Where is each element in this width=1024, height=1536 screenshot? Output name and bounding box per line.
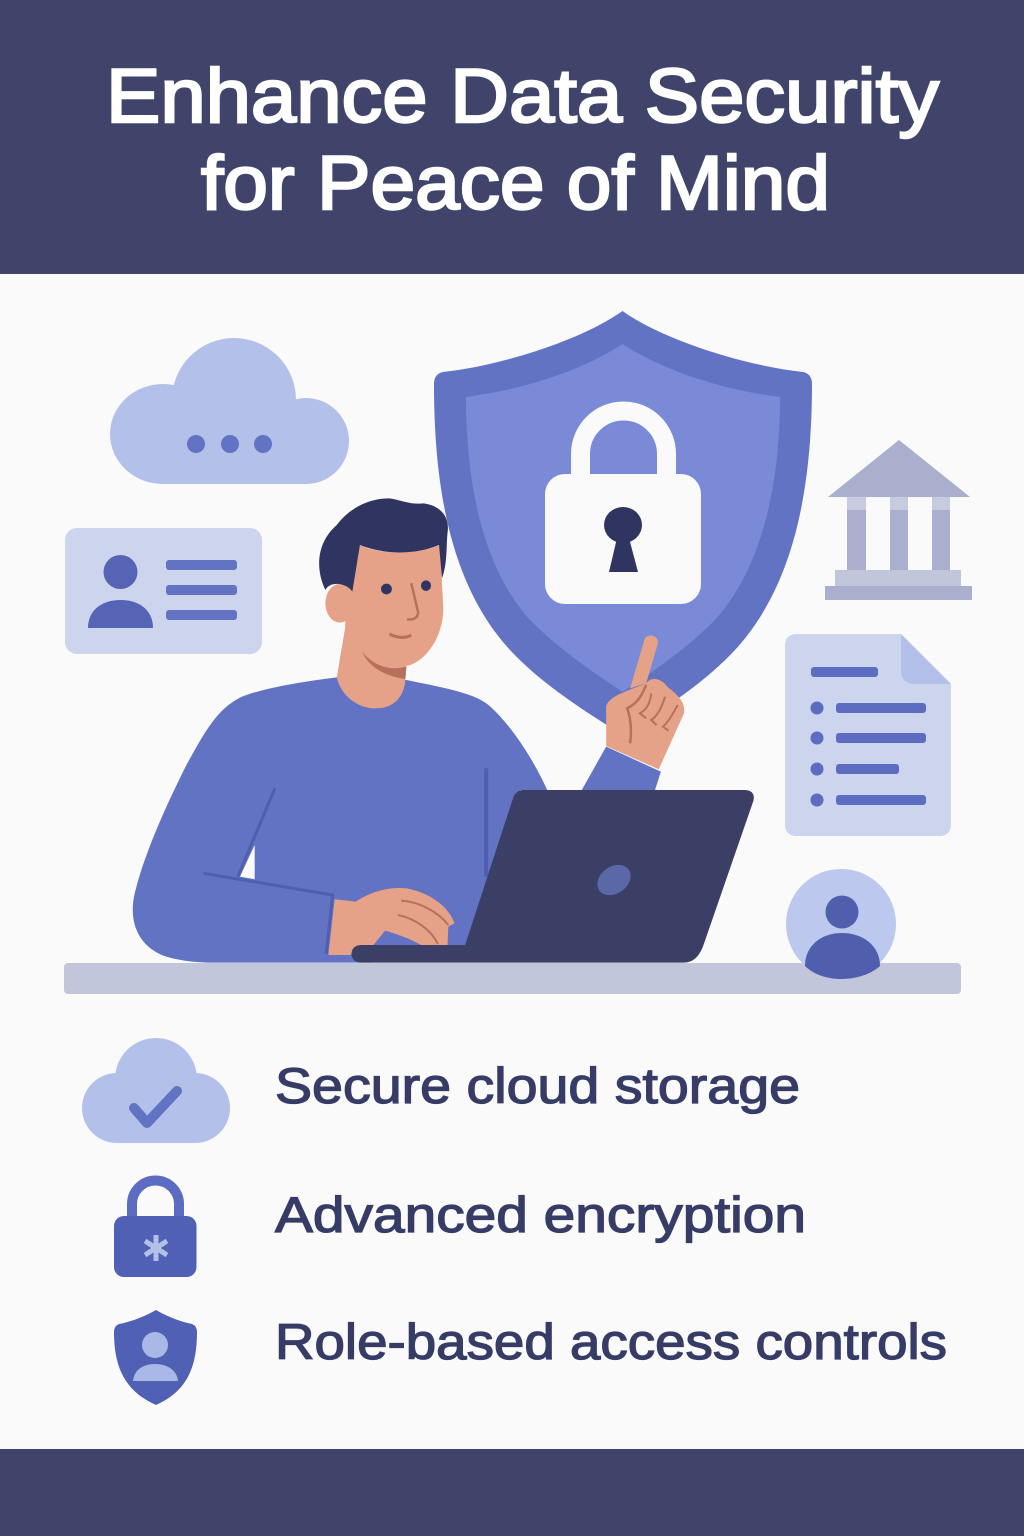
title — [106, 54, 939, 226]
sweater seams — [203, 768, 486, 954]
header band with title — [0, 0, 1024, 274]
icon: document checklist — [785, 634, 951, 836]
raised sleeve — [581, 747, 661, 792]
icon: shield with user — [114, 1310, 197, 1405]
label: Advanced encryption — [275, 1187, 806, 1243]
nose and mouth — [389, 583, 418, 637]
icon: cloud with dots — [110, 338, 349, 484]
eyes — [381, 580, 431, 594]
feature row: advanced encryption — [114, 1180, 806, 1277]
sweater — [133, 677, 547, 963]
person at laptop — [133, 498, 754, 963]
title: Enhance Data Security — [106, 54, 939, 139]
feature row: secure cloud storage — [82, 1038, 800, 1143]
label: Secure cloud storage — [275, 1058, 800, 1114]
laptop logo — [592, 859, 636, 901]
footer band — [0, 1449, 1024, 1536]
icon: user avatar — [786, 869, 896, 979]
hair — [319, 498, 448, 592]
typing hand — [328, 888, 455, 955]
icon: ID card — [65, 528, 262, 654]
shield with padlock — [434, 311, 812, 735]
label: Role-based access controls — [275, 1314, 947, 1370]
neck — [337, 620, 407, 708]
neck shadow — [362, 652, 406, 679]
padlock — [545, 411, 701, 604]
desk — [64, 963, 961, 994]
icon: cloud with check — [82, 1038, 230, 1143]
icon: bank building — [825, 440, 972, 600]
laptop — [351, 790, 754, 963]
face — [345, 545, 443, 666]
raised hand — [606, 636, 684, 769]
sweater gap — [240, 845, 255, 879]
feature row: role-based access controls — [114, 1310, 947, 1405]
icon: padlock with asterisk — [114, 1180, 196, 1277]
ear — [325, 584, 354, 623]
title: for Peace of Mind — [201, 141, 830, 226]
